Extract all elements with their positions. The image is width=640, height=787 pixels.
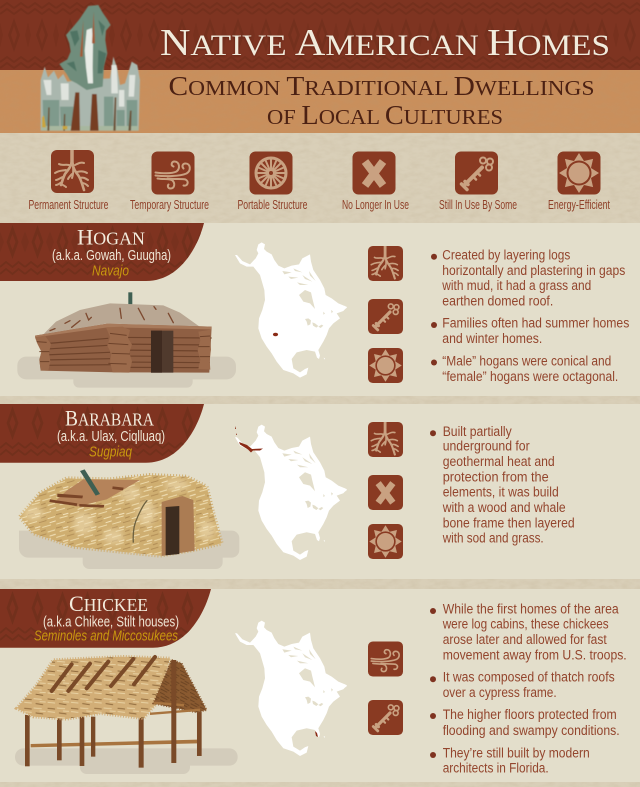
chickee tribes: Seminoles and Miccosukees	[34, 629, 178, 645]
hogan heading banner	[0, 223, 204, 281]
legend item: no longer in use	[342, 152, 409, 212]
legend item: permanent structure: Permanent Structure	[28, 197, 108, 212]
barabara name: BARABARA	[65, 406, 154, 431]
panel: legend	[0, 133, 640, 223]
bullet four	[430, 745, 590, 776]
bullet two: over a cypress frame.	[443, 685, 557, 700]
header banner	[0, 0, 640, 133]
map: barabara region	[235, 425, 347, 560]
hogan facts	[431, 247, 630, 384]
illustration: hogan dwelling	[17, 292, 236, 388]
bullet two	[431, 316, 630, 346]
linen divider three	[0, 782, 640, 787]
bullet one: were log cabins, these chickees	[442, 617, 609, 632]
icon: permanent structure	[368, 246, 403, 281]
chickee heading banner	[0, 589, 211, 648]
legend background	[0, 133, 640, 223]
bullet one: While the first homes of the area	[443, 601, 619, 616]
bullet one	[431, 247, 626, 309]
barabara aliases: (a.k.a. Ulax, Ciqlluaq)	[57, 429, 165, 445]
linen divider two	[0, 579, 640, 589]
bullet two	[430, 670, 615, 700]
icon: temporary structure	[368, 642, 403, 676]
icon: still in use	[368, 700, 403, 735]
subtitle line two: OF LOCAL CULTURES	[267, 100, 503, 130]
icon: no longer in use	[368, 475, 403, 510]
barabara facts: bone frame then layered	[443, 515, 575, 530]
barabara facts: with a wood and whale	[442, 500, 566, 515]
barabara facts: Built partially	[443, 424, 512, 439]
map highlight	[315, 731, 318, 737]
barabara facts	[430, 424, 575, 546]
panel: barabara	[0, 404, 640, 579]
map highlight	[235, 426, 263, 452]
bullet two: It was composed of thatch roofs	[443, 670, 615, 685]
icon: permanent structure	[368, 422, 403, 457]
illustration: barabara dwelling	[19, 469, 239, 569]
illustration: chickee dwelling	[15, 657, 238, 774]
barabara facts: with sod and grass.	[442, 531, 544, 546]
legend item: no longer in use: No Longer In Use	[342, 197, 409, 212]
bullet three: The higher floors protected from	[443, 707, 617, 722]
barabara facts: underground for	[443, 439, 530, 454]
legend item: portable structure	[238, 152, 308, 212]
bullet three	[431, 354, 618, 384]
hogan name: HOGAN	[77, 225, 145, 250]
bullet one: arose later and allowed for fast	[443, 632, 607, 647]
legend item: temporary structure	[130, 152, 209, 212]
barabara tribe: Sugpiaq	[89, 445, 132, 461]
chickee aliases: (a.k.a Chikee, Stilt houses)	[43, 615, 179, 631]
barabara facts: protection from the	[443, 469, 549, 484]
icon: still in use	[368, 299, 403, 334]
legend item: temporary structure: Temporary Structure	[130, 197, 209, 212]
bullet three: flooding and swampy conditions.	[443, 723, 620, 738]
section background	[0, 404, 640, 579]
barabara facts: elements, it was build	[443, 485, 559, 500]
bullet three	[430, 707, 620, 738]
map highlight	[273, 333, 278, 336]
illustration: sequoia trees	[41, 5, 140, 131]
legend item: energy-efficient: Energy-Efficient	[548, 197, 610, 212]
barabara heading banner	[0, 404, 204, 463]
bullet one: with mud, it had a grass and	[441, 278, 591, 293]
red title band	[0, 0, 640, 70]
chickee facts	[430, 601, 627, 776]
legend item: portable structure: Portable Structure	[238, 197, 308, 212]
legend item: energy-efficient	[548, 152, 610, 212]
hogan tribe: Navajo	[92, 264, 129, 280]
bullet one: earthen domed roof.	[442, 294, 553, 309]
bullet four: architects in Florida.	[443, 761, 549, 776]
subtitle line one: COMMON TRADITIONAL DWELLINGS	[168, 71, 594, 101]
hogan aliases: (a.k.a. Gowah, Guugha)	[52, 248, 171, 264]
bullet four: They’re still built by modern	[443, 745, 590, 760]
legend item: still in use by some: Still In Use By Some	[439, 197, 517, 212]
bullet one: Created by layering logs	[442, 247, 571, 262]
map: hogan region	[235, 242, 347, 378]
bullet three: “Male” hogans were conical and	[442, 354, 611, 369]
bullet three: “female” hogans were octagonal.	[442, 369, 618, 384]
section background	[0, 589, 640, 782]
main title: NATIVE AMERICAN HOMES	[160, 22, 610, 64]
legend item: still in use by some	[439, 152, 517, 212]
tan subtitle band	[0, 70, 640, 133]
map: chickee region	[235, 621, 347, 756]
icon: energy-efficient	[368, 348, 403, 383]
panel: chickee	[0, 589, 640, 782]
chickee name: CHICKEE	[69, 591, 148, 616]
linen divider one	[0, 396, 640, 404]
bullet two: and winter homes.	[442, 331, 542, 346]
bullet one	[430, 601, 627, 662]
section background	[0, 223, 640, 397]
barabara facts: geothermal heat and	[443, 454, 555, 469]
panel: hogan	[0, 223, 640, 397]
legend item: permanent structure	[28, 150, 108, 212]
icon: energy-efficient	[368, 524, 403, 559]
